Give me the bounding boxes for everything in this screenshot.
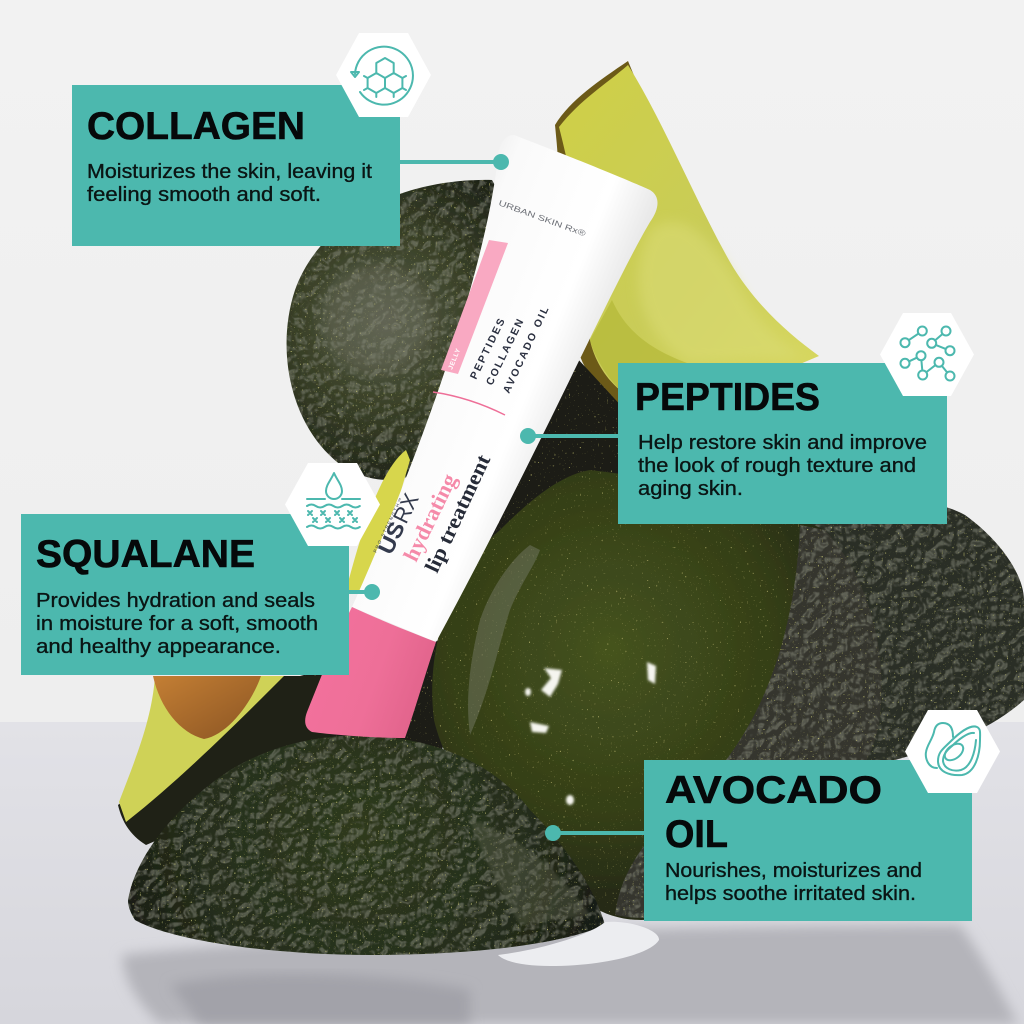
top left avocado	[287, 180, 560, 480]
ingredients on tube: COLLAGEN	[484, 317, 526, 387]
description	[638, 431, 927, 500]
panel: avocado oil	[545, 710, 1000, 921]
connector	[545, 825, 644, 841]
panel: peptides	[520, 313, 974, 524]
description: Help restore skin and improve	[638, 431, 927, 454]
icon: molecule hexagon	[336, 33, 431, 117]
icon: skin hydration hexagon	[285, 463, 380, 546]
heading: PEPTIDES	[635, 376, 820, 419]
rough grey highlight on top avocado	[320, 265, 430, 375]
avocado seed	[153, 676, 261, 739]
background wall	[0, 0, 1024, 722]
avocado photo composition	[118, 61, 1024, 966]
connector	[520, 428, 618, 444]
panel: squalane	[21, 463, 380, 675]
avocado slice top	[555, 61, 819, 412]
description: helps soothe irritated skin.	[665, 882, 916, 905]
pink label bar	[441, 240, 508, 374]
heading: OIL	[665, 813, 728, 856]
heading: AVOCADO	[665, 769, 882, 812]
panel: collagen	[72, 33, 509, 246]
pink divider curve	[433, 392, 505, 415]
left avocado half	[118, 676, 330, 845]
USRX logo: PRO STRENGTH™	[372, 497, 403, 553]
oil drip on avocado	[468, 545, 540, 735]
description: Provides hydration and seals	[36, 589, 315, 612]
big centre avocado	[432, 470, 882, 920]
connector	[349, 584, 380, 600]
description: feeling smooth and soft.	[87, 183, 321, 206]
specular highlights	[525, 662, 656, 805]
heading	[665, 769, 882, 856]
product tube	[305, 135, 658, 738]
description: Moisturizes the skin, leaving it	[87, 160, 372, 183]
lip treatment text: lip treatment	[420, 451, 495, 576]
jelly label: JELLY	[447, 347, 462, 371]
oil-free right crescent of centre avocado	[615, 525, 882, 918]
tube cap	[305, 607, 436, 738]
ingredients on tube	[468, 304, 552, 395]
icon: avocado hexagon	[905, 710, 1000, 793]
ingredients on tube: PEPTIDES	[468, 317, 508, 381]
description	[87, 160, 372, 206]
tube body	[352, 135, 658, 642]
reflective floor	[0, 722, 1024, 1024]
back right avocado	[700, 503, 1024, 800]
description: aging skin.	[638, 477, 743, 500]
front avocado highlights	[470, 820, 590, 925]
description: the look of rough texture and	[638, 454, 916, 477]
front avocado half	[128, 735, 605, 955]
hydrating text: hydrating	[398, 470, 462, 565]
dark avocado behind peptides	[300, 340, 640, 760]
description: and healthy appearance.	[36, 635, 281, 658]
brand name: URBAN SKIN Rx®	[497, 198, 587, 238]
avocado reflection on floor	[122, 925, 1018, 1024]
USRX logo	[372, 489, 424, 558]
heading: SQUALANE	[36, 533, 255, 576]
description	[36, 589, 318, 658]
USRX logo: RX	[388, 489, 424, 527]
yellow slice behind tube	[346, 450, 410, 590]
ingredients on tube: AVOCADO OIL	[501, 304, 552, 395]
USRX logo: US	[373, 518, 410, 558]
description	[665, 859, 922, 905]
connector	[400, 154, 509, 170]
description: Nourishes, moisturizes and	[665, 859, 922, 882]
icon: peptide chains hexagon	[880, 313, 974, 396]
milk puddle	[498, 922, 659, 966]
heading: COLLAGEN	[87, 105, 305, 148]
darker patches in reflection	[170, 974, 470, 1024]
description: in moisture for a soft, smooth	[36, 612, 318, 635]
